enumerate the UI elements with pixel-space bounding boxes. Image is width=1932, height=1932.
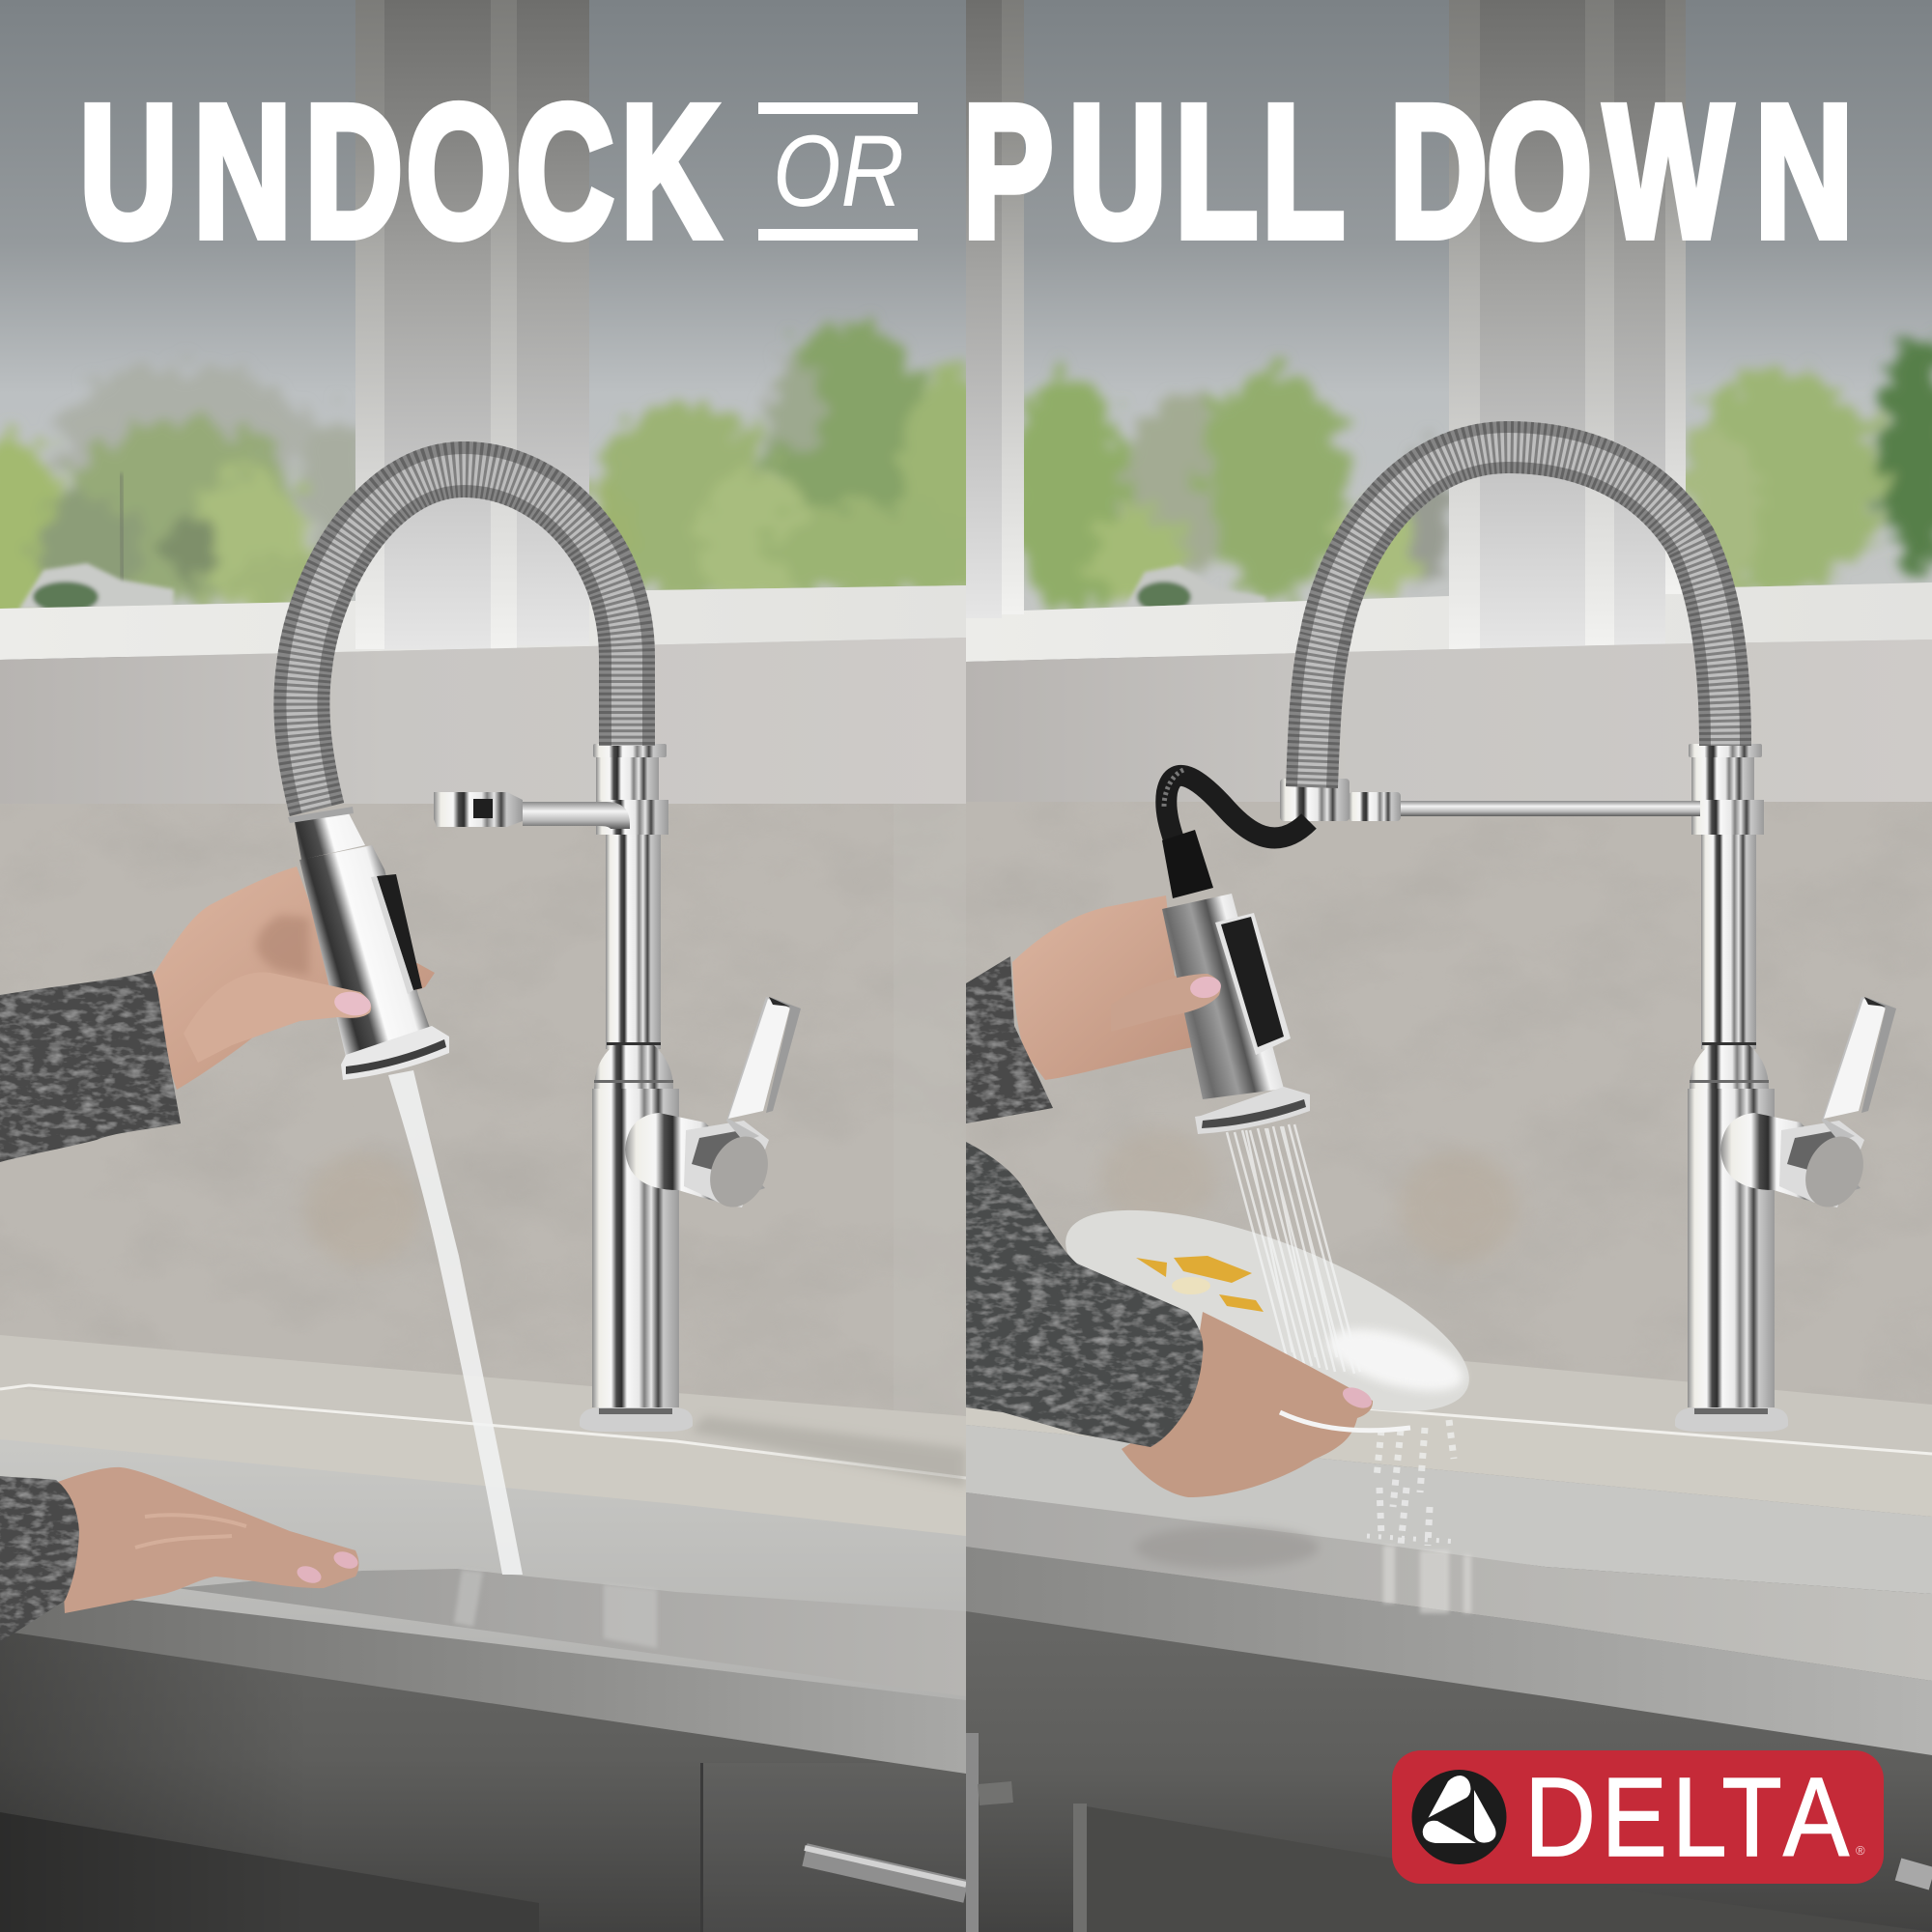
window sill	[0, 585, 966, 660]
right drawer handle	[1898, 1869, 1932, 1879]
faucet body	[580, 744, 801, 1432]
water stream	[388, 1070, 523, 1575]
title word: OR: OR	[773, 115, 904, 228]
faucet body	[1675, 744, 1896, 1432]
distant house	[1125, 565, 1265, 612]
cabinet shading	[0, 1633, 220, 1932]
sink interior	[0, 1435, 966, 1700]
dripping water	[1367, 1420, 1459, 1546]
water pool	[1322, 1317, 1469, 1404]
water reflection on counter	[1383, 1546, 1471, 1613]
flexible spring hose	[301, 469, 627, 810]
button	[1215, 913, 1291, 1055]
plate rim	[1280, 1412, 1410, 1431]
sweater cuff upper	[966, 956, 1053, 1123]
window frame mullion	[355, 0, 589, 649]
sweater sleeve: upper arm	[0, 971, 181, 1162]
drawer handle	[805, 1855, 966, 1891]
thumb and nail	[184, 973, 373, 1063]
countertop front surface	[966, 1492, 1932, 1681]
faucet reflections on counter	[454, 1570, 657, 1648]
title	[79, 67, 1853, 277]
rear counter lip	[0, 1387, 966, 1536]
trees: first pane	[1009, 367, 1454, 613]
logo wordmark: DELTA	[1524, 1755, 1849, 1880]
rear counter surface	[966, 1315, 1932, 1454]
distant house	[19, 563, 174, 612]
docking arm	[434, 792, 630, 829]
window frame	[966, 0, 1686, 649]
lower hand	[1122, 1312, 1410, 1497]
countertop front surface	[181, 1569, 889, 1663]
panel: pull down scene (right)	[966, 0, 1932, 1932]
plate reflection on counter	[1135, 1526, 1319, 1569]
upper wall band	[966, 639, 1932, 802]
title bar bottom	[758, 229, 918, 241]
docking arm	[1280, 779, 1700, 821]
rear counter lip	[966, 1377, 1932, 1517]
title bar top	[758, 102, 918, 114]
trees: left pane	[0, 363, 355, 609]
left drawer handle	[966, 1733, 979, 1932]
cabinet	[0, 1633, 966, 1932]
cabinet	[966, 1565, 1932, 1932]
sink interior	[966, 1425, 1932, 1594]
pull-out spray head	[288, 807, 449, 1080]
title word: UNDOCK: UNDOCK	[79, 67, 719, 277]
upper wall band	[0, 638, 966, 804]
window sky	[966, 0, 1932, 657]
upper hand behind spray head	[153, 867, 435, 1090]
flexible spring hose	[1312, 447, 1725, 787]
window sill	[966, 582, 1932, 662]
registered mark: ®	[1856, 1843, 1865, 1858]
lower hand on counter	[58, 1467, 360, 1613]
countertop rear surface	[0, 1335, 966, 1478]
countertop front lip	[15, 1600, 966, 1774]
title word: PULL DOWN: PULL DOWN	[963, 67, 1853, 277]
faucet shadow	[691, 1416, 966, 1488]
black braided pull-down hose	[1164, 770, 1309, 842]
panel: undock scene (left)	[0, 0, 1000, 1932]
thumb and nail	[1111, 974, 1222, 1032]
food scraps	[1136, 1256, 1264, 1312]
window sky	[0, 0, 966, 657]
water spray	[1227, 1124, 1360, 1374]
sweater sleeve	[966, 1142, 1203, 1447]
button	[377, 874, 422, 990]
trees: right pane	[589, 313, 966, 590]
marble backsplash	[966, 802, 1932, 1420]
lower sweater sleeve	[0, 1476, 79, 1642]
plate	[1042, 1169, 1492, 1453]
Delta logo badge	[1392, 1750, 1884, 1884]
upper hand behind spray head	[1012, 895, 1219, 1080]
countertop front lip	[966, 1547, 1932, 1755]
marble backsplash	[0, 804, 966, 1441]
logo icon: triangle drops	[1412, 1770, 1507, 1864]
trees: second pane	[1681, 333, 1932, 599]
pull-out spray head	[1162, 830, 1310, 1134]
